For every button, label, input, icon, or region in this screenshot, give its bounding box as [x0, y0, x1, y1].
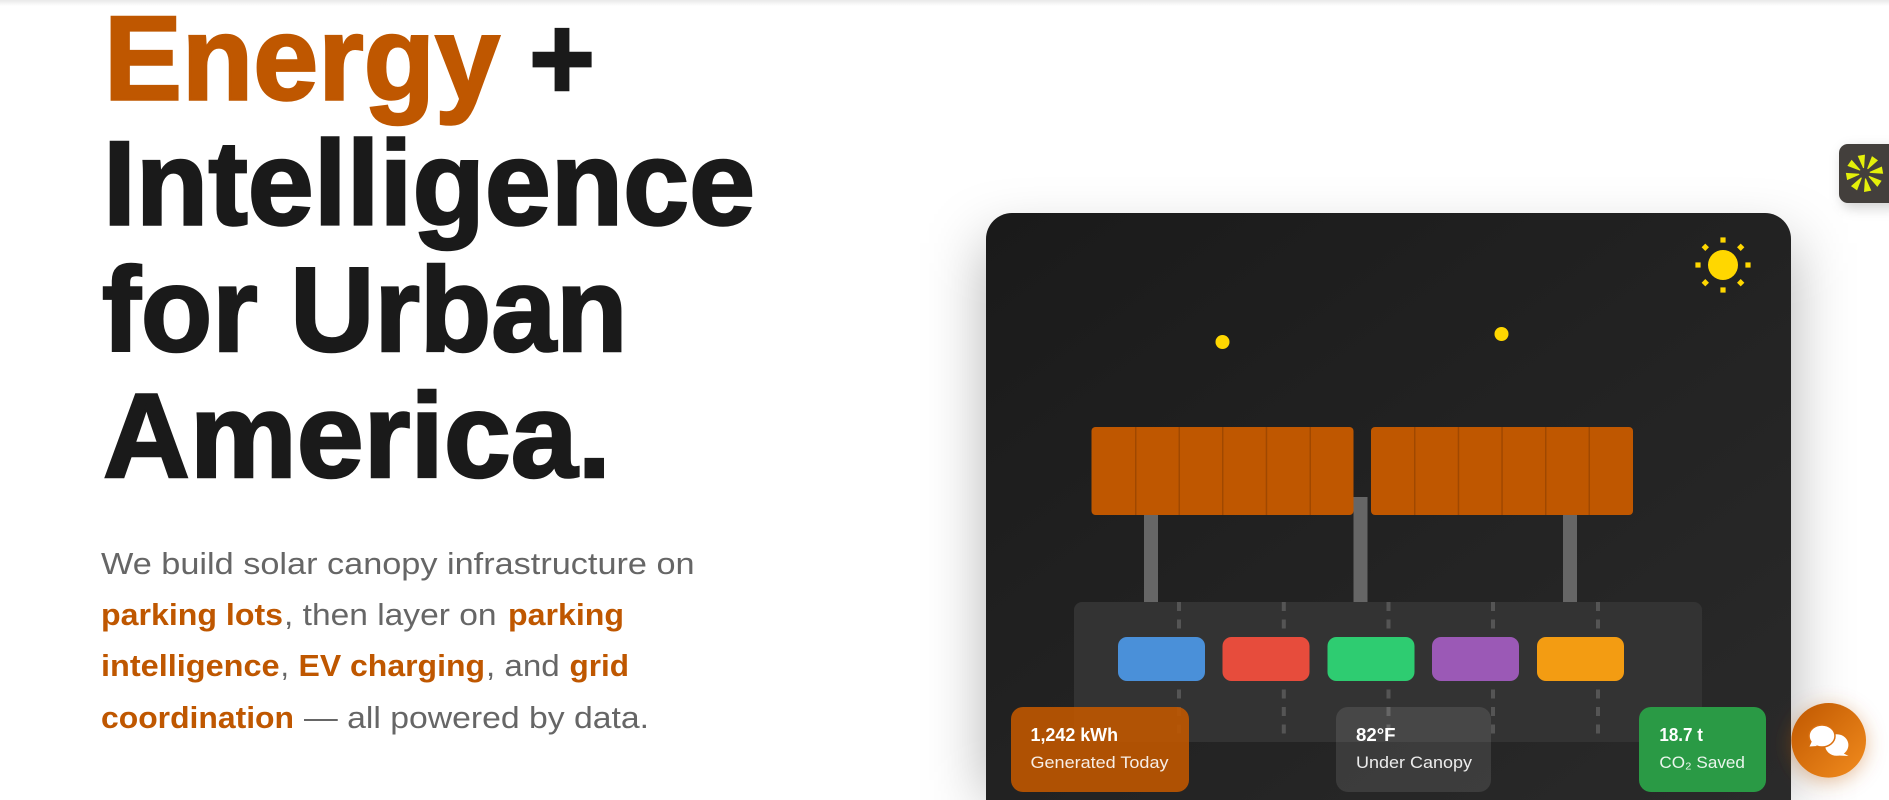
description paragraph: coordination: [101, 701, 294, 735]
icon: chat bubbles: [1809, 725, 1848, 756]
description paragraph: ,: [280, 649, 289, 683]
car: red: [1222, 637, 1310, 681]
description paragraph: intelligence: [101, 649, 280, 683]
description paragraph: [101, 547, 695, 735]
title: [102, 0, 755, 503]
description paragraph: , and: [486, 649, 560, 683]
stat card: generated today: 1,242 kWh: [1030, 725, 1118, 745]
stat card: CO2 saved: CO₂ Saved: [1659, 753, 1745, 772]
icon: sun: [1695, 237, 1751, 293]
panel: solar canopy illustration: [986, 213, 1791, 800]
title: for Urban: [102, 243, 628, 377]
description paragraph: — all powered by data.: [304, 701, 649, 735]
stat card: under canopy: 82°F: [1356, 725, 1396, 745]
description paragraph: , then layer on: [284, 598, 496, 632]
stat card: generated today: Generated Today: [1030, 753, 1169, 772]
car: blue: [1118, 637, 1205, 681]
stat card: CO2 saved: 18.7 t: [1659, 725, 1703, 745]
car: purple: [1432, 637, 1519, 681]
stat card: under canopy: Under Canopy: [1356, 753, 1473, 772]
description paragraph: EV charging: [298, 649, 485, 683]
floating widget: asterisk: [1839, 144, 1889, 208]
stat card: under canopy: [1336, 707, 1491, 792]
stat card: CO2 saved: [1639, 707, 1766, 792]
description paragraph: parking lots: [101, 598, 283, 632]
title: America.: [103, 369, 611, 503]
car: amber: [1537, 637, 1624, 681]
canopy posts: [1144, 497, 1577, 602]
solar panel left: [1092, 427, 1354, 515]
description paragraph: We build solar canopy infrastructure on: [101, 547, 695, 581]
chat button: [1791, 703, 1866, 781]
energy particles: [1216, 327, 1508, 349]
description paragraph: parking: [508, 598, 624, 632]
parking lot: [1074, 602, 1702, 742]
car: green: [1328, 637, 1414, 681]
title: Intelligence: [103, 116, 755, 250]
stat card: generated today: [1011, 707, 1189, 792]
description paragraph: grid: [570, 649, 629, 683]
solar panel right: [1371, 427, 1633, 515]
